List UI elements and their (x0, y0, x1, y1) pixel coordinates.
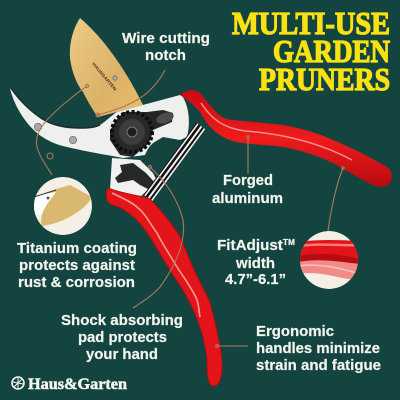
text: wire cutting notch (122, 31, 210, 64)
text: fitadjust width: width (235, 256, 275, 272)
icon: titanium coating circle (34, 177, 92, 235)
spring (145, 124, 205, 201)
text: wire cutting notch: Wire cutting (122, 31, 210, 47)
text: shock absorbing pad: your hand (86, 347, 158, 363)
text: wire cutting notch: notch (145, 48, 186, 64)
text: ergonomic handles: Ergonomic (256, 324, 334, 340)
text: ergonomic handles: strain and fatigue (256, 358, 381, 374)
rivets (34, 76, 117, 144)
text: shock absorbing pad (61, 313, 183, 363)
callout lines (36, 70, 344, 347)
text: fitadjust width (217, 238, 295, 288)
upper blade (70, 18, 143, 117)
lower red handle (106, 188, 222, 386)
text: forged aluminum: Forged (223, 173, 273, 189)
lower handle highlight (112, 193, 200, 317)
logo: Haus&Garten (28, 376, 127, 393)
text: titanium coating: protects against (19, 258, 135, 274)
text: titanium coating: rust & corrosion (18, 275, 135, 291)
upper handle highlight (201, 103, 352, 160)
text: fitadjust width: 4.7”-6.1” (225, 272, 286, 288)
text: titanium coating (17, 241, 137, 291)
text: shock absorbing pad: pad protects (78, 330, 167, 346)
upper red handle (180, 90, 392, 187)
lower jaw and head (10, 88, 189, 158)
text: forged aluminum (212, 173, 283, 207)
gear pivot (110, 110, 175, 157)
text: fitadjust width: TM (283, 238, 295, 247)
jaw dark edge (11, 88, 100, 128)
lock mechanism (115, 163, 157, 190)
text: ergonomic handles (256, 324, 381, 374)
text: titanium coating: Titanium coating (17, 241, 137, 257)
text: fitadjust width: FitAdjust (217, 238, 280, 254)
lower handle base (110, 158, 158, 197)
text: ergonomic handles: handles minimize (256, 341, 380, 357)
text: shock absorbing pad: Shock absorbing (61, 313, 183, 329)
brand text on blade: HAUSGARTEN (91, 61, 118, 91)
icon: handle cross-section circle (298, 231, 360, 289)
text: forged aluminum: aluminum (212, 191, 283, 207)
title (232, 5, 390, 97)
